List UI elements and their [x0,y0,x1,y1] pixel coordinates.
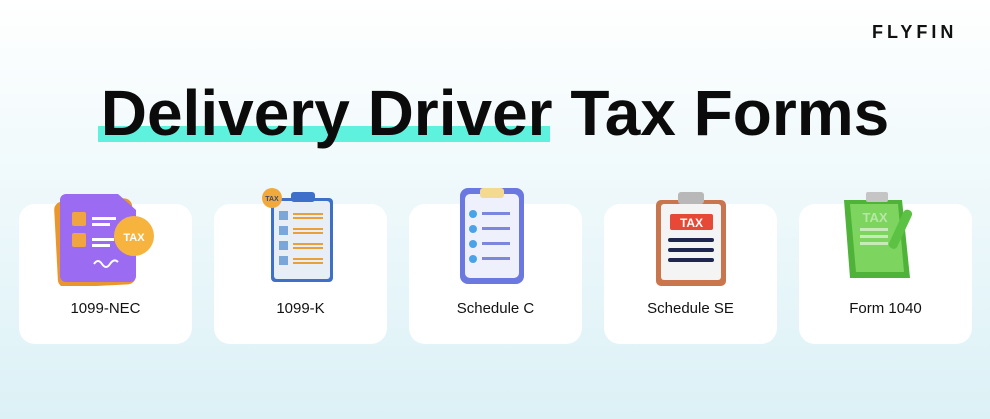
icon: Schedule SE clipboard: TAX [680,216,703,230]
logo: FLYFIN [872,22,957,42]
icon: 1099-NEC document: TAX [123,232,145,244]
title: Delivery Driver Tax Forms [101,77,889,149]
card: Form 1040 [799,204,972,344]
title highlight [98,126,550,142]
card: Schedule C: Schedule C [457,300,534,317]
card: 1099-K [214,204,387,344]
card: Schedule C [409,204,582,344]
card: 1099-K: 1099-K [276,300,325,317]
icon: Form 1040 green clipboard: TAX [862,210,888,225]
icon: Schedule SE clipboard [656,192,726,286]
card: Form 1040: Form 1040 [849,300,922,317]
icon: 1099-NEC document [54,194,154,286]
card: 1099-NEC: 1099-NEC [70,300,141,317]
card: 1099-NEC [19,204,192,344]
icon: 1099-K clipboard: TAX [265,196,279,203]
icon: Schedule C checklist [460,188,524,284]
icon: 1099-K clipboard [262,188,333,282]
card: Schedule SE: Schedule SE [647,300,734,317]
icon: Form 1040 green clipboard [844,192,912,278]
card: Schedule SE [604,204,777,344]
